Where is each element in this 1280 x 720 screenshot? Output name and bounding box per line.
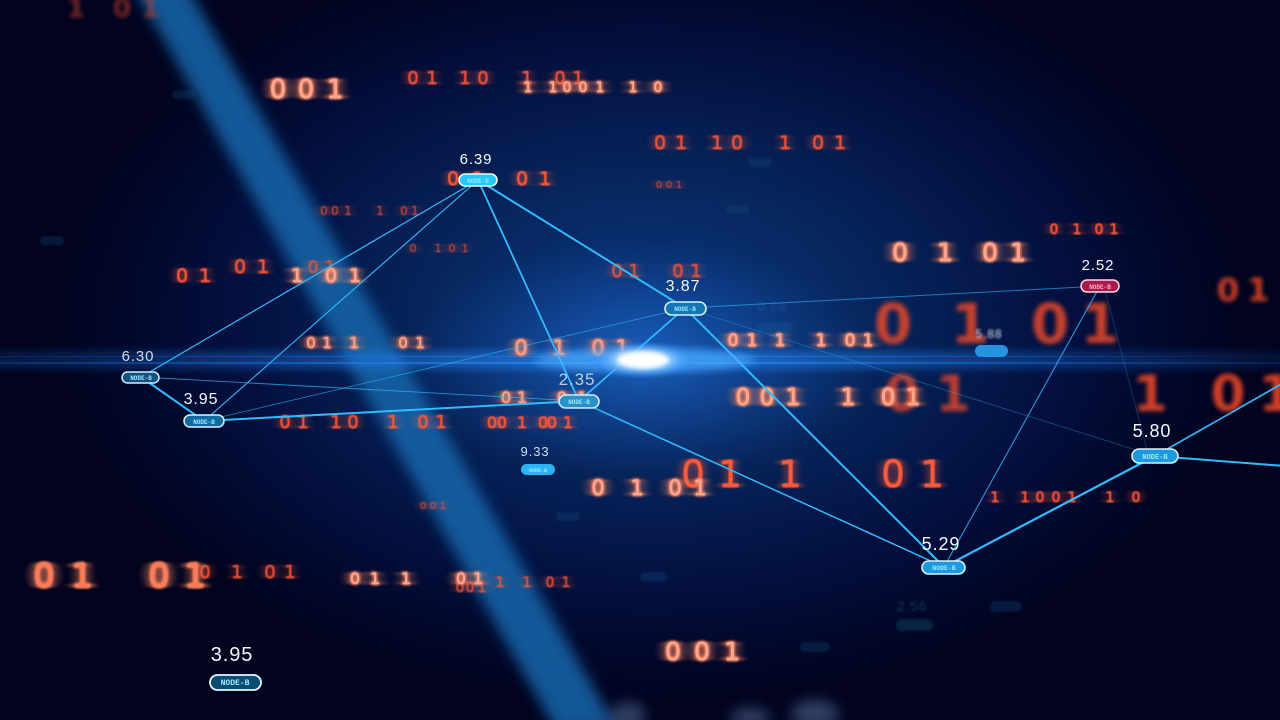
node 5.29: NODE-B [932,565,956,572]
binary digits: blurred out of focus: 01 [885,365,970,423]
node 2.52 [1081,257,1119,292]
binary digits: sharp glowing: 01101 [306,334,425,352]
binary digits: sharp glowing [34,75,1026,666]
node 3.87 [665,278,706,315]
node 2.52: 2.52 [1082,257,1114,274]
node 9.33: 9.33 [521,444,549,459]
binary digits: semi focus warm [176,68,1140,596]
binary digits: semi focus warm: 0101 [199,562,296,583]
binary digits: semi focus warm: 0101 [1050,222,1118,238]
node 3.95 lower left: NODE-B [221,679,250,688]
blurred shapes at bottom edge [610,700,839,720]
binary digits: sharp glowing: 0101 [34,556,206,595]
binary digits: sharp glowing: 0101 [514,336,629,360]
binary digits: small faded: 001 [656,180,682,191]
binary digits: semi focus warm: 001 [456,580,486,596]
faded background nodes [40,90,1022,652]
node 9.33 [521,444,555,475]
node 3.87: 3.87 [666,278,700,295]
binary digits: sharp glowing: 011101 [728,331,873,351]
binary digits: semi focus warm: 1100110 [991,490,1140,506]
node 5.88 [975,327,1008,357]
node 3.95: NODE-B [193,419,215,426]
binary digits: semi focus warm: 0110101 [407,68,584,89]
node 5.29 [922,534,965,574]
binary digits: small faded: 001 [420,501,446,512]
binary digits: semi focus warm: 0110101 [654,132,846,154]
binary digits: semi focus warm: 01 [234,256,269,278]
node 6.39 [459,151,497,186]
node 2.35: 2.35 [559,370,595,389]
node 3.87: NODE-B [674,306,696,313]
binary digits: sharp glowing: 101 [291,265,361,287]
node 5.80: 5.80 [1133,421,1171,441]
binary digits: sharp glowing: 0101 [501,388,587,407]
binary digits: semi focus warm: 0110101 [279,412,447,433]
binary digits: sharp glowing: 1100110 [524,80,662,96]
network lines [141,180,1280,567]
node 6.39: NODE-B [467,178,489,185]
node 5.80: NODE-B [1142,454,1168,462]
binary digits: semi focus warm: 0101 [611,261,702,282]
binary digits: sharp glowing: 01101 [350,569,483,588]
horizontal light streak [0,351,1280,369]
binary digits: small faded [320,180,682,512]
binary digits: small faded: 0101 [410,242,468,255]
node 3.95: 3.95 [184,391,218,408]
binary digits: semi focus warm: 01 [308,258,335,278]
binary digits: blurred out of focus: 0101 [874,292,1119,356]
binary digits: sharp glowing: 0101 [892,238,1026,267]
binary digits: sharp glowing: 001 [270,75,343,105]
node 5.80 [1132,421,1178,463]
node 2.52: NODE-B [1089,284,1111,291]
faded background nodes: 2.56 [897,598,927,614]
node 9.33: NODE-B [529,468,547,474]
node 2.35 [559,370,599,408]
central halo [400,240,880,480]
lens flare [535,341,755,379]
node 2.35: NODE-B [568,399,590,406]
node 3.95 lower left: 3.95 [211,644,253,666]
binary digits: semi focus warm: 01101 [681,453,944,496]
node 3.95 lower left [210,644,261,690]
binary digits: sharp glowing: 001101 [736,385,920,411]
binary digits: semi focus warm: 0101 [447,168,551,190]
binary digits: small faded: 001101 [320,204,419,218]
node 5.88: 5.88 [976,327,1002,341]
binary digits: blurred out of focus [67,0,1280,423]
node 6.30 [122,348,159,383]
binary digits: sharp glowing: 0101 [591,476,707,500]
binary digits: semi focus warm: 001001 [487,413,573,432]
binary digits: sharp glowing: 001 [665,637,740,666]
node 5.29: 5.29 [922,534,960,554]
binary digits: semi focus warm: 1101 [496,575,570,591]
node 6.39: 6.39 [460,151,492,168]
faded background nodes: 0.59 [758,299,786,314]
binary digits: semi focus warm: 01 [176,265,211,287]
binary digits: blurred out of focus: 01 [1217,271,1269,309]
node 6.30: NODE-B [130,375,152,382]
diagonal light beam [130,0,618,720]
node 3.95 [184,391,224,427]
node 6.30: 6.30 [122,348,154,365]
